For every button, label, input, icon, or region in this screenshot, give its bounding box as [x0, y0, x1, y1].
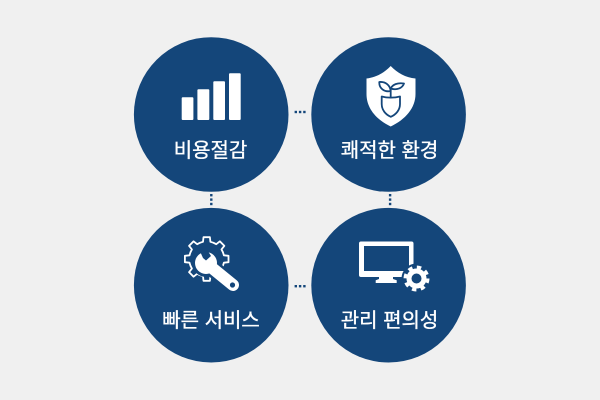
panel: cost saving: [134, 37, 288, 192]
icon: gear and wrench: [185, 237, 235, 288]
panel: management convenience: [311, 208, 466, 362]
label: pleasant environment: 쾌적한 환경: [341, 139, 438, 162]
label: cost saving: 비용절감: [174, 139, 247, 162]
icon: shield with sprout: [366, 66, 416, 126]
connector: top horizontal dots: [295, 111, 306, 113]
icon: monitor with gear: [359, 242, 432, 294]
label: fast service: 빠른 서비스: [162, 309, 260, 332]
connector: bottom horizontal dots: [295, 285, 306, 287]
icon: rising bars: [182, 73, 241, 120]
connector: right vertical dots: [389, 194, 391, 205]
label: management convenience: 관리 편의성: [341, 309, 438, 332]
panel: fast service: [134, 208, 288, 362]
panel: pleasant environment: [311, 37, 466, 192]
connector: left vertical dots: [210, 194, 212, 205]
